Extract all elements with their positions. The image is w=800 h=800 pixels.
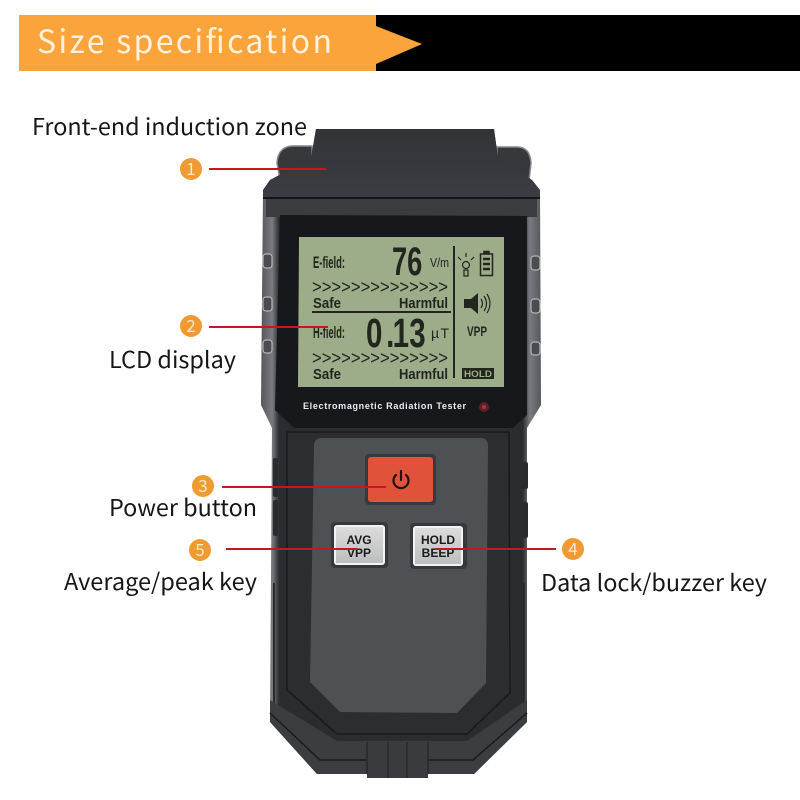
callout 4: data lock / buzzer key: Data lock/buzzer key (541, 564, 767, 598)
H-field scale: Harmful (399, 366, 448, 383)
E-field label: E-field: (313, 253, 345, 272)
bottom centre grip (367, 742, 428, 778)
icon: bulb (458, 253, 474, 276)
callout 2: LCD display: LCD display (109, 341, 236, 375)
callout 3: power button (109, 472, 386, 523)
callout 1: front-end induction zone: 1 (186, 155, 196, 180)
upper band (266, 199, 537, 217)
callout 3: power button: 3 (198, 472, 208, 497)
device name: Electromagnetic Radiation Tester (303, 401, 466, 411)
callout 3: power button: Power button (109, 489, 257, 523)
E-field unit: V/m (430, 255, 449, 270)
callout 1: front-end induction zone: Front-end induction zone (32, 108, 307, 142)
header banner (19, 15, 800, 71)
icon: power (394, 471, 409, 488)
device: EMF radiation tester (261, 129, 541, 778)
E-field scale: Safe (313, 295, 341, 312)
callout 4: data lock / buzzer key (435, 535, 767, 598)
callout 1: front-end induction zone (32, 108, 326, 180)
HOLD BEEP key: HOLD (421, 533, 455, 547)
lower black frame (287, 432, 510, 734)
E-field scale: Harmful (399, 295, 448, 312)
E-field reading: 76 (392, 240, 422, 284)
callout 2: LCD display (109, 312, 327, 375)
HOLD BEEP key: BEEP (422, 546, 454, 560)
lower side slots (273, 458, 528, 708)
callout 2: LCD display: 2 (186, 312, 196, 337)
H-field chevrons: >>>>>>>>>>>>>> (312, 348, 448, 368)
E-field scale (313, 295, 448, 312)
device ears (277, 146, 531, 190)
VPP indicator: VPP (467, 323, 487, 339)
LCD screen (298, 237, 504, 387)
HOLD BEEP key (410, 523, 467, 569)
LCD bezel (275, 215, 527, 428)
power button (365, 454, 436, 505)
indicator LED (479, 402, 489, 412)
H-field label: H-field: (313, 323, 345, 342)
cap seam (263, 197, 540, 199)
AVG VPP key (331, 522, 388, 568)
top cap (263, 129, 540, 198)
E-field chevrons: >>>>>>>>>>>>>> (312, 277, 448, 297)
header title: Size specification (37, 17, 332, 63)
icon: battery (480, 252, 492, 276)
AVG VPP key: AVG (346, 533, 372, 547)
HOLD indicator: HOLD (464, 369, 492, 380)
AVG VPP key: VPP (347, 546, 371, 560)
H-field unit: µT (431, 325, 449, 341)
device body (261, 129, 541, 774)
button panel (310, 438, 488, 713)
icon: speaker (464, 293, 490, 314)
callout 5: average / peak key: 5 (195, 536, 205, 561)
H-field scale: Safe (313, 366, 341, 383)
callout 5: average / peak key: Average/peak key (64, 563, 257, 597)
bottom bumper lines (270, 713, 527, 760)
callout 4: data lock / buzzer key: 4 (568, 535, 578, 560)
H-field reading: 0.13 (366, 310, 426, 356)
H-field scale (313, 366, 448, 383)
lower bumper band (270, 700, 527, 774)
callout 5: average / peak key (64, 536, 357, 597)
side grips (263, 254, 540, 355)
